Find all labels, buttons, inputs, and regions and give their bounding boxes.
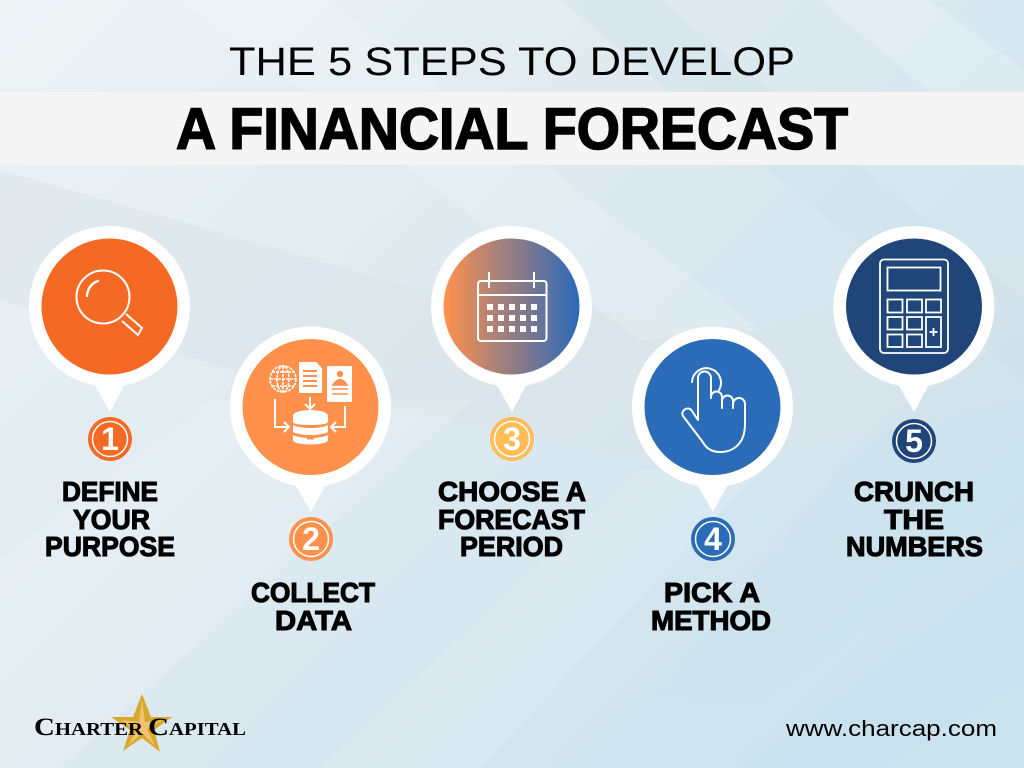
number badge 5: 5 [905, 423, 923, 459]
label: crunch the numbers: CRUNCH [854, 476, 974, 507]
pin: white circle with pointer [29, 226, 190, 412]
label: choose a forecast period: FORECAST [438, 504, 585, 535]
icon: calendar [478, 272, 546, 341]
number badge 5 [892, 419, 936, 463]
label: choose a forecast period: PERIOD [460, 531, 563, 562]
database [293, 410, 328, 444]
number badge 3 [490, 417, 534, 461]
label: pick a method [651, 577, 771, 636]
icon: pointing hand [682, 368, 745, 452]
label: pick a method: METHOD [651, 605, 771, 636]
number badge 4 [691, 517, 735, 561]
step 4 panel: pick a method [632, 326, 793, 636]
label: define your purpose: DEFINE [62, 476, 158, 507]
label: define your purpose: YOUR [73, 504, 150, 535]
icon: magnifying glass [76, 270, 142, 335]
label: choose a forecast period [438, 476, 586, 562]
label: crunch the numbers: NUMBERS [846, 531, 983, 562]
step 3 panel: choose a forecast period [431, 226, 592, 562]
icon: data sources into database [270, 362, 352, 444]
title band [0, 92, 1024, 165]
label: define your purpose: PURPOSE [45, 531, 175, 562]
step 5 panel: crunch the numbers [833, 226, 994, 562]
label: define your purpose [45, 476, 175, 562]
arrows [275, 397, 345, 432]
id card [327, 366, 352, 402]
label: collect data [251, 577, 375, 636]
pin: white circle with pointer [632, 326, 793, 512]
step 2 panel: collect data [230, 326, 391, 636]
title line: THE 5 STEPS TO DEVELOP [229, 40, 795, 84]
orange disc [242, 339, 378, 475]
number badge 2: 2 [302, 521, 320, 557]
website url: www.charcap.com [785, 716, 997, 741]
gradient disc [444, 238, 580, 374]
icon: calculator [880, 260, 948, 353]
number badge 4: 4 [704, 521, 722, 557]
logo wordmark: CHARTER CAPITAL [34, 714, 246, 741]
number badge 1: 1 [101, 421, 119, 457]
orange disc [42, 238, 178, 374]
number badge 1 [88, 417, 132, 461]
logo: charter capital [34, 694, 246, 752]
label: collect data: COLLECT [251, 577, 375, 608]
pin: white circle with pointer [230, 326, 391, 512]
document [299, 362, 322, 393]
label: pick a method: PICK A [664, 577, 760, 608]
number badge 2 [289, 517, 333, 561]
step 1 panel: define your purpose [29, 226, 190, 562]
number badge 3: 3 [503, 421, 521, 457]
label: choose a forecast period: CHOOSE A [438, 476, 586, 507]
navy disc [846, 238, 982, 374]
main heading: A FINANCIAL FORECAST [176, 97, 848, 162]
blue disc [644, 339, 780, 475]
label: crunch the numbers [846, 476, 983, 562]
pin: white circle with pointer [833, 226, 994, 412]
label: collect data: DATA [275, 605, 352, 636]
label: crunch the numbers: THE [884, 504, 944, 535]
globe [270, 366, 296, 392]
pin: white circle with pointer [431, 226, 592, 412]
icon: gold star [111, 694, 172, 752]
